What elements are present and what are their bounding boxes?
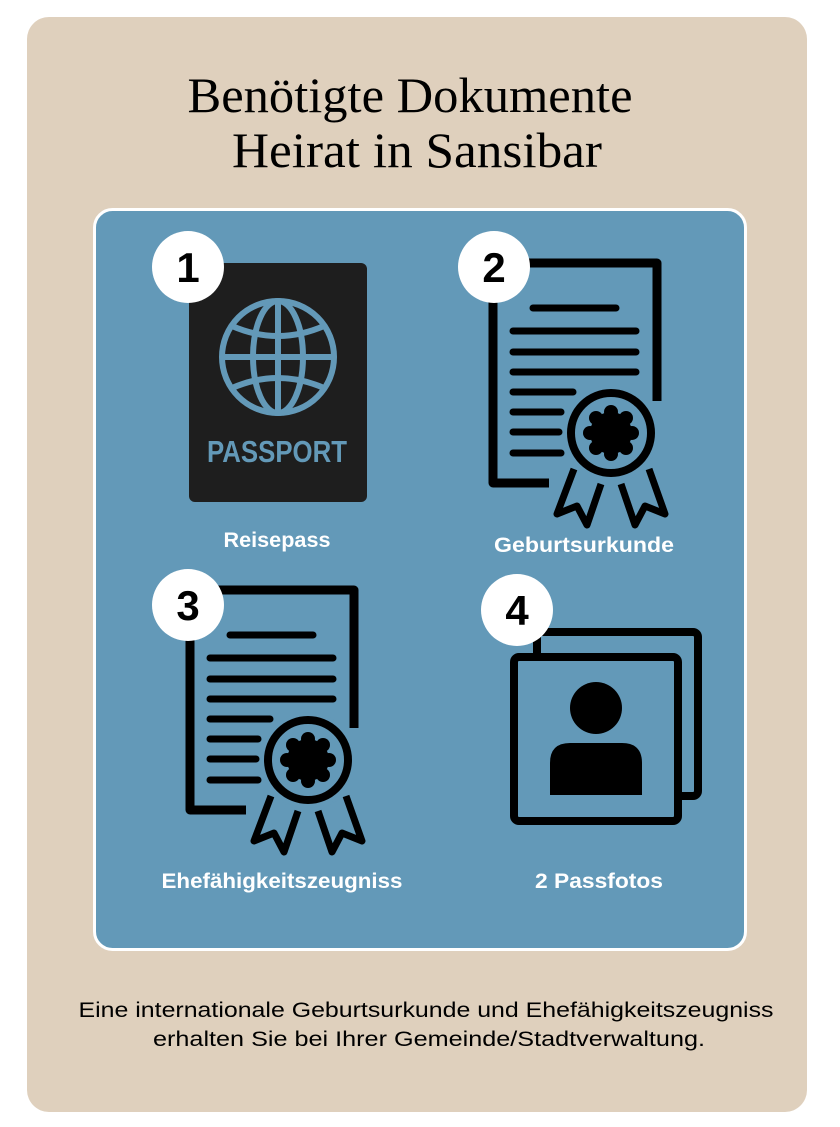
badge 4	[481, 574, 553, 646]
panel: documents	[94, 210, 746, 950]
labels: Reisepass	[224, 529, 330, 552]
title: Heirat in Sansibar	[232, 122, 602, 178]
icon: passport: PASSPORT	[207, 434, 347, 469]
badge 1	[152, 231, 224, 303]
title: Benötigte Dokumente	[188, 67, 632, 123]
footer note: erhalten Sie bei Ihrer Gemeinde/Stadtverwaltung.	[153, 1028, 705, 1051]
badge 3: 3	[176, 582, 200, 629]
icon: certificate of no impediment	[190, 590, 362, 852]
title	[188, 67, 632, 178]
labels: Geburtsurkunde	[494, 534, 674, 557]
labels: Ehefähigkeitszeugniss	[162, 870, 402, 893]
badge 4: 4	[505, 587, 529, 634]
footer note: Eine internationale Geburtsurkunde und Ehefähigkeitszeugniss	[78, 999, 774, 1022]
badge 1: 1	[176, 244, 200, 291]
footer note	[78, 999, 774, 1051]
icon: birth certificate	[493, 263, 665, 525]
badge 2: 2	[482, 244, 506, 291]
labels: 2 Passfotos	[535, 870, 663, 893]
badge 2	[458, 231, 530, 303]
icon: passport	[189, 263, 367, 502]
badge 3	[152, 569, 224, 641]
labels	[162, 529, 674, 893]
icon: passport photos	[514, 632, 698, 821]
